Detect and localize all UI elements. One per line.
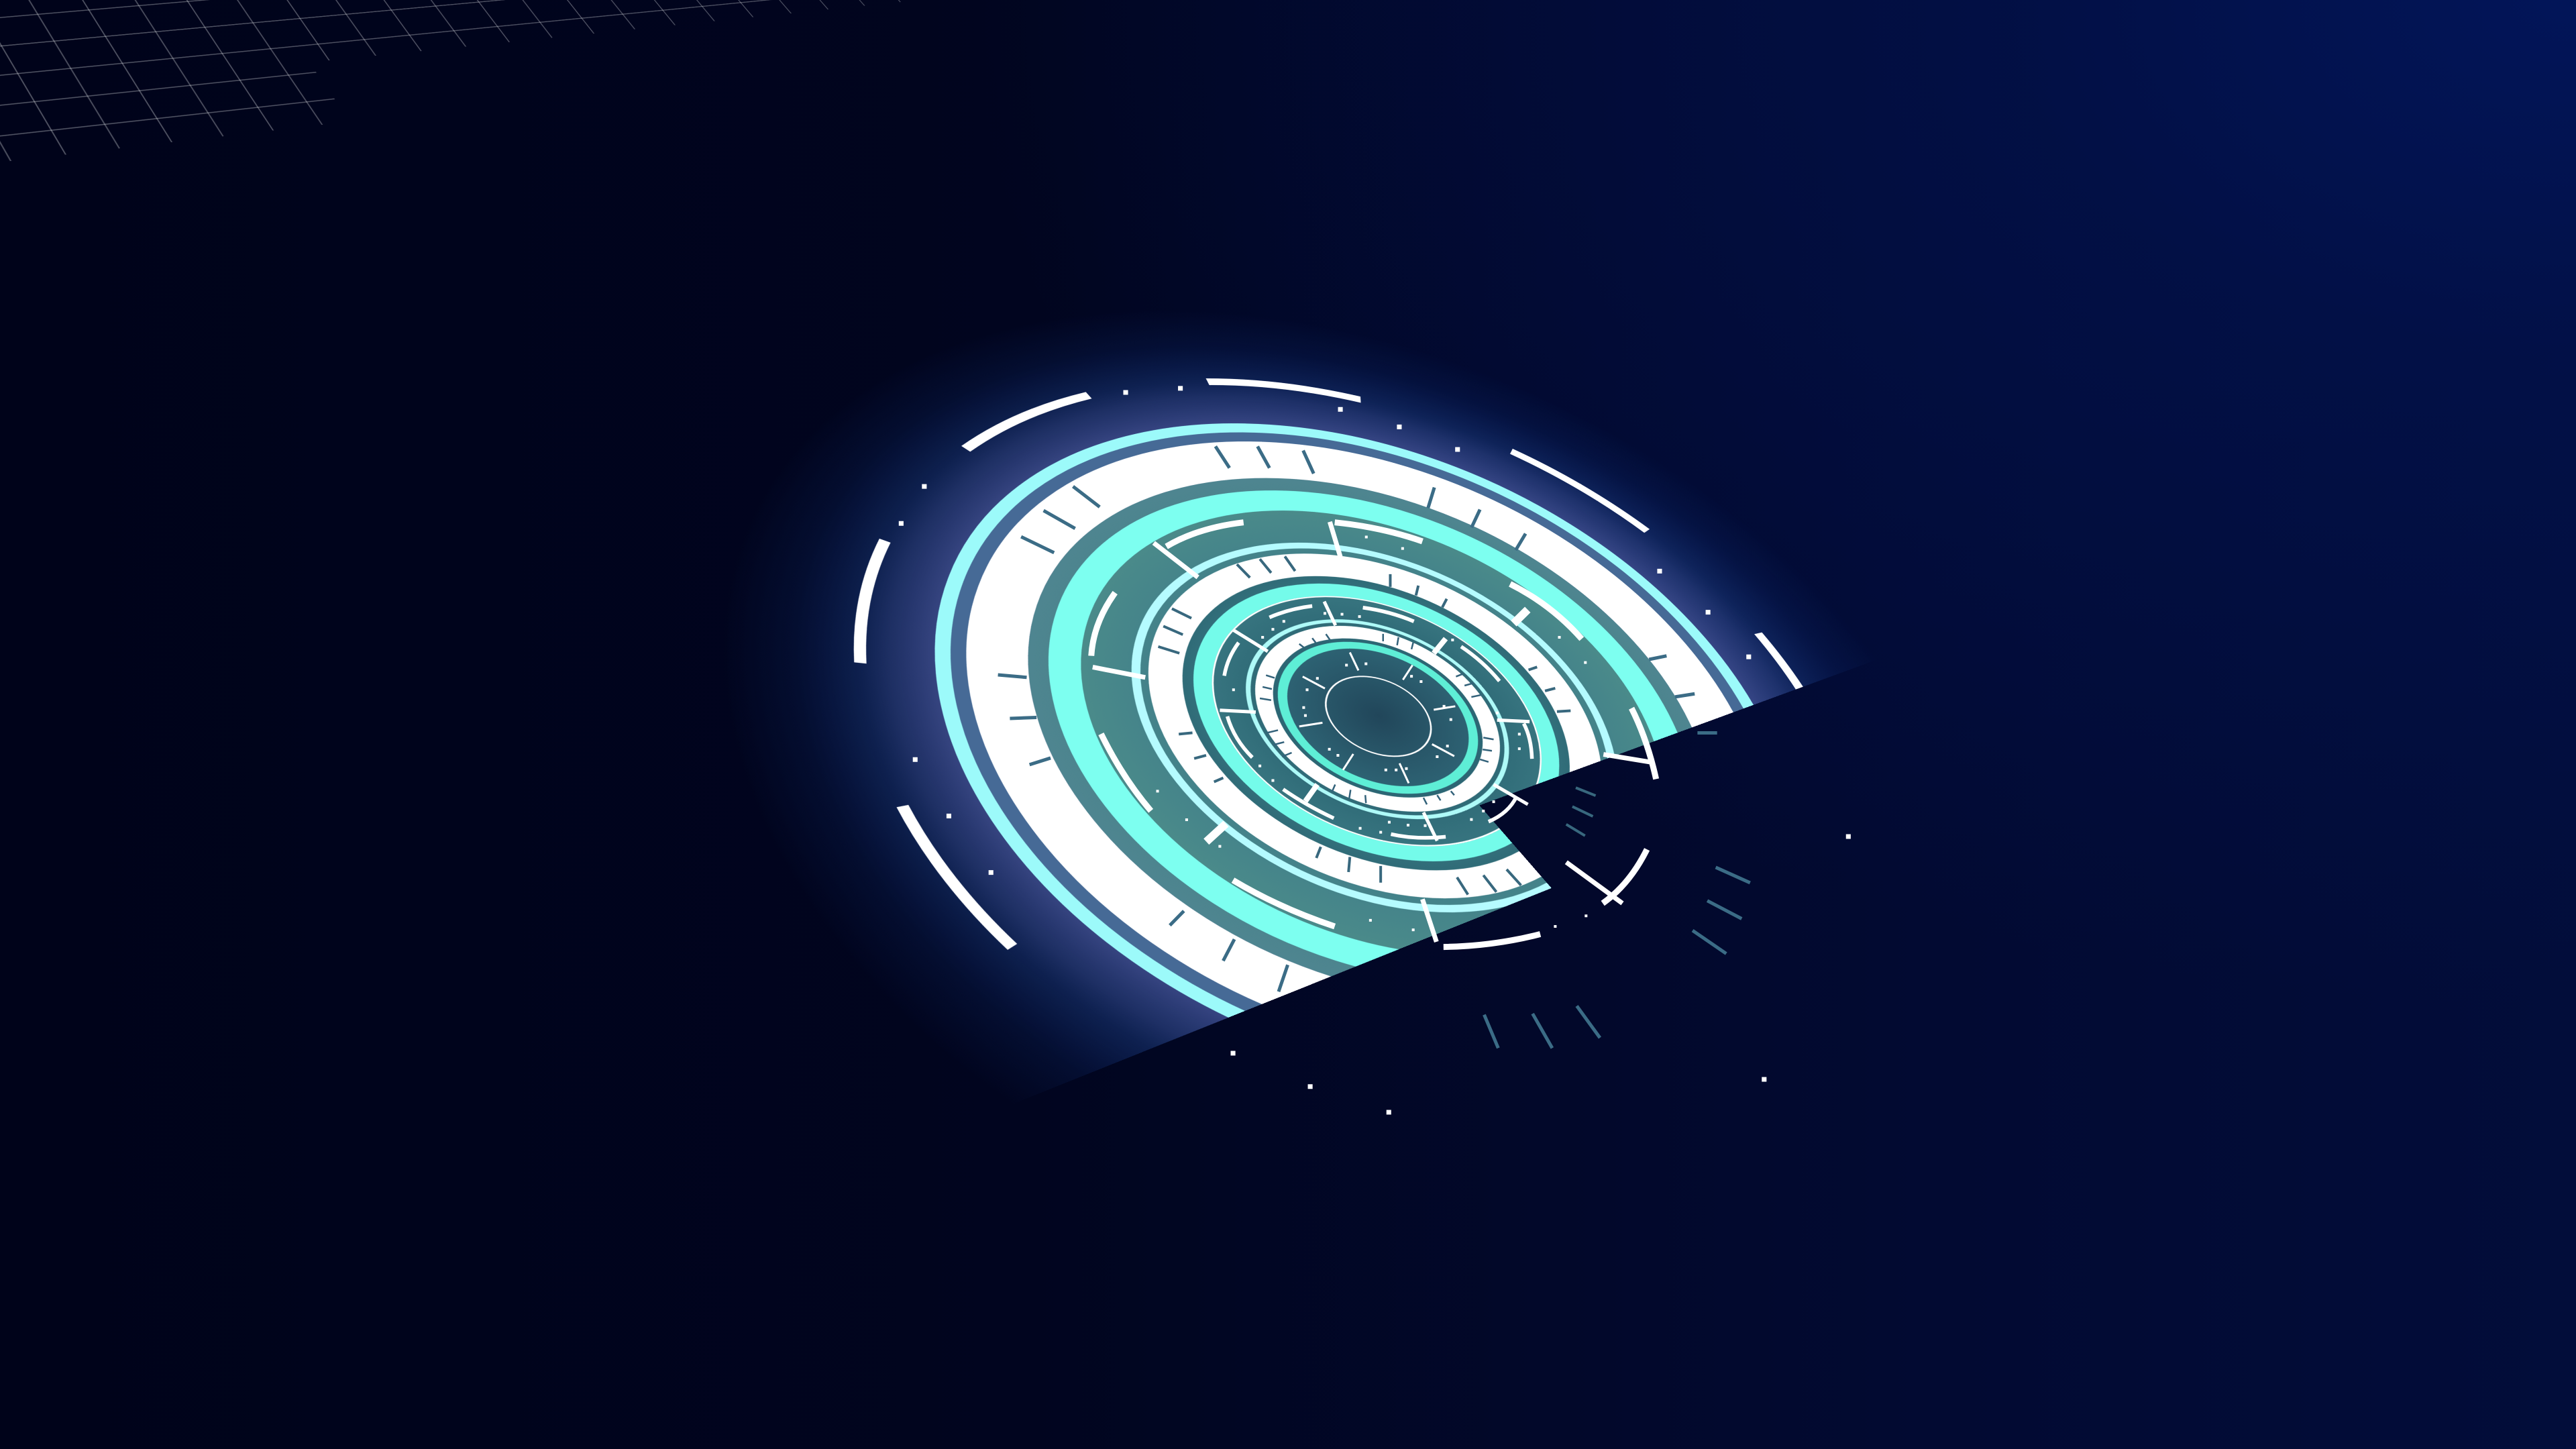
outer segmented dashes ring bbox=[667, 318, 2061, 1328]
second cyan ring bbox=[1133, 559, 1621, 898]
bright cyan ring bbox=[943, 453, 1803, 1059]
centre thin circle bbox=[1305, 665, 1452, 768]
dark ticks on second white ring bbox=[1159, 556, 1596, 895]
outer scattered dots bbox=[901, 388, 1848, 1112]
gap band between outer ring and white ring bbox=[798, 380, 1939, 1193]
thin pale ring bbox=[1041, 506, 1710, 973]
thick white crossing bars bbox=[1206, 610, 1527, 842]
white arcs in the outer teal band bbox=[1091, 523, 1656, 947]
concentric HUD rings drawn on the floor plane bbox=[390, 201, 2312, 1449]
dark ticks on third white ring bbox=[1260, 634, 1494, 804]
outer pale cyan ring bbox=[778, 370, 1958, 1214]
halo glow behind the rings bbox=[478, 237, 2233, 1449]
white radial bars in the outer teal band bbox=[1093, 522, 1650, 942]
outer group of details bbox=[901, 388, 1848, 1112]
white arcs in the middle band bbox=[1224, 606, 1532, 838]
outer dark ticks on the thick white ring bbox=[998, 446, 1750, 1048]
grid lines running down-right bbox=[0, 205, 2576, 1157]
third white ring bbox=[1218, 610, 1537, 832]
hairline under second cyan ring bbox=[1147, 567, 1607, 887]
centre radial ticks bbox=[1299, 653, 1455, 783]
inner scattered dots bbox=[1158, 537, 1586, 930]
thick white ring bbox=[851, 406, 1890, 1142]
inner group of details bbox=[1158, 537, 1596, 930]
white radial bars in the middle band bbox=[1220, 602, 1529, 841]
second white ring bbox=[1081, 529, 1670, 940]
inner mint ring bbox=[1244, 627, 1512, 812]
thick white crossing bars, middle band bbox=[1305, 639, 1446, 801]
teal inner disk bbox=[893, 427, 1850, 1104]
third thin pale ring bbox=[1196, 597, 1559, 849]
grid lines running up-right bbox=[1228, 0, 2576, 1432]
